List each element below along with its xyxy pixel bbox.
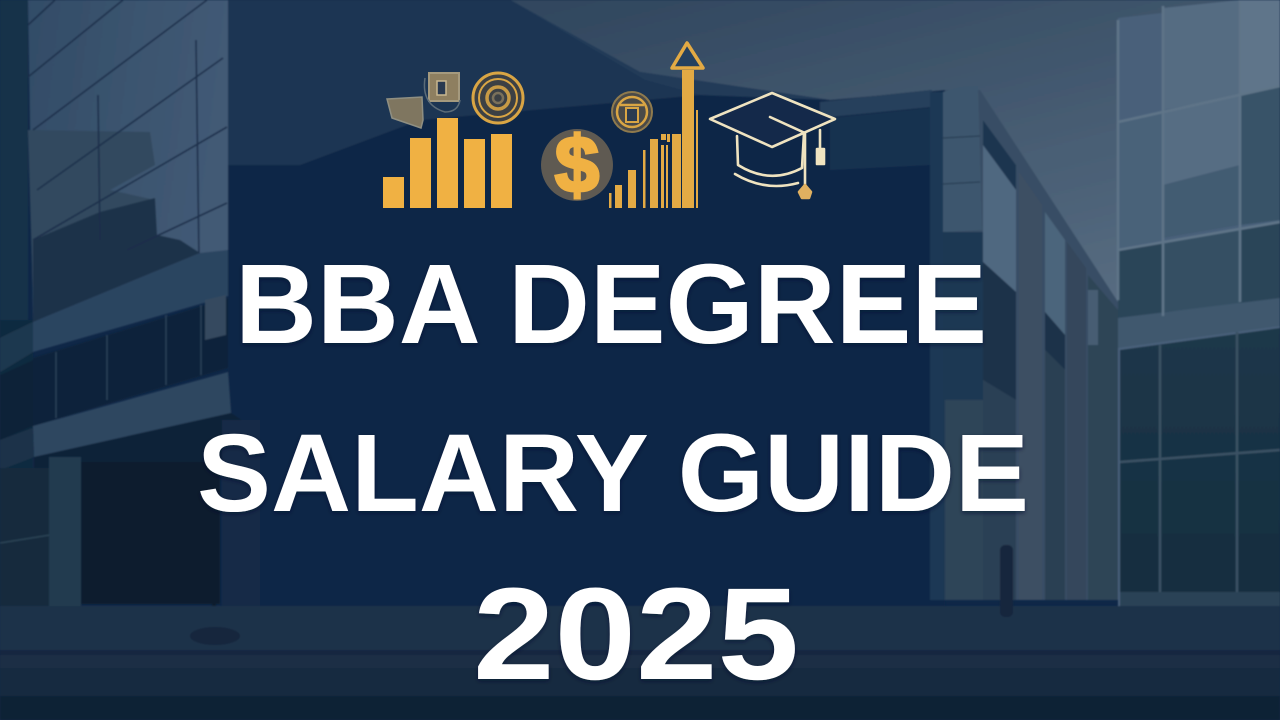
right building band xyxy=(1118,298,1280,348)
title line 2: SALARY GUIDE xyxy=(197,412,1029,535)
icon: dollar coin: $ xyxy=(555,120,599,209)
mid building corner tower xyxy=(943,86,982,232)
right glass building xyxy=(1118,0,1280,610)
mid building right face xyxy=(945,90,1120,600)
icon: gold ring coin xyxy=(473,73,523,123)
ground and steps xyxy=(0,606,1280,650)
icon: gold bar chart xyxy=(383,118,512,208)
title line 1: BBA DEGREE xyxy=(235,241,987,367)
icon: growth bars with upward arrow xyxy=(609,43,703,208)
reflected building on glass xyxy=(28,130,155,300)
icon: dollar coin xyxy=(541,120,613,209)
right building frames xyxy=(1118,0,1280,316)
navy central facade xyxy=(228,0,945,610)
sky xyxy=(500,0,1280,330)
title xyxy=(197,241,1029,707)
title line 3: 2025 xyxy=(473,560,799,707)
left building upper band xyxy=(33,250,228,352)
icon: graduation cap xyxy=(710,93,835,198)
right building lower glass strip xyxy=(1118,222,1280,318)
right building lower glass xyxy=(1120,328,1280,592)
left building lower band xyxy=(33,372,231,457)
mid building windows xyxy=(983,120,1016,292)
person silhouette xyxy=(1000,545,1013,617)
left building dark windows xyxy=(33,298,228,426)
shrub xyxy=(190,627,240,645)
left soffit xyxy=(34,413,250,470)
dark lower reflection xyxy=(33,198,200,322)
left upper glass facade xyxy=(28,0,228,322)
left ground-floor recess xyxy=(0,468,50,606)
far-left dark tower xyxy=(0,0,28,320)
right building base xyxy=(1120,592,1280,610)
columns xyxy=(49,457,81,609)
mid building front xyxy=(820,90,932,600)
icon: small sketched coin xyxy=(612,92,652,132)
upper side of left building xyxy=(228,0,700,165)
icon: sketched chat and document symbols xyxy=(387,73,460,128)
